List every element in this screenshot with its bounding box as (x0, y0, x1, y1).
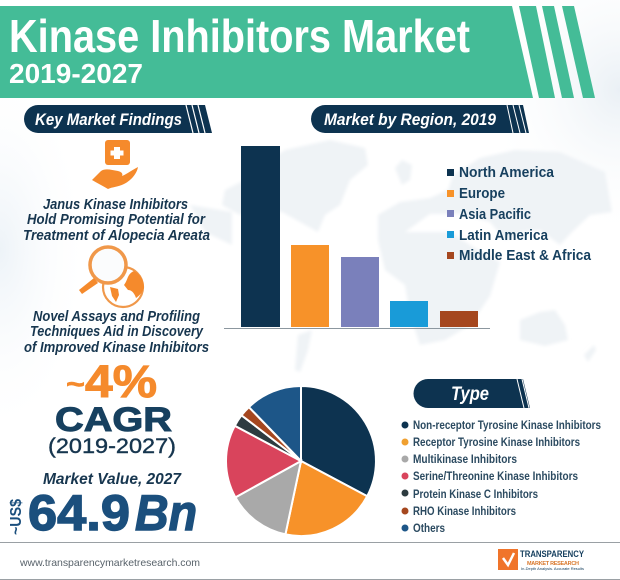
subtitle years: 2019-2027 (9, 58, 143, 89)
legend: types (402, 420, 601, 535)
legend: regions: Asia Pacific (459, 207, 531, 223)
text: janus kinase finding: Hold Promising Potential for (27, 212, 206, 228)
currency label: ~US$ (8, 499, 25, 535)
bar chart: market by region (224, 146, 490, 328)
text: novel assays finding: of Improved Kinase Inhibitors (24, 340, 209, 356)
heading: type (414, 379, 530, 408)
logo: transparency market research: MARKET RESEARCH (527, 561, 579, 567)
market value figure (28, 485, 197, 541)
text: novel assays finding: Novel Assays and Profiling (33, 309, 200, 325)
market value figure: 64.9 (28, 485, 130, 541)
logo: transparency market research: In-Depth Analysis. Accurate Results (521, 567, 584, 571)
pie chart: type (226, 386, 376, 536)
cagr value: ~ (66, 368, 85, 401)
cagr period: (2019-2027) (48, 435, 176, 458)
cagr value: 4% (85, 356, 157, 407)
market value label: Market Value, 2027 (43, 471, 182, 488)
legend: types: Multikinase Inhibitors (413, 454, 517, 466)
text: janus kinase finding (23, 197, 210, 244)
text: janus kinase finding: Janus Kinase Inhibitors (43, 197, 188, 213)
logo: transparency market research: TRANSPARENCY (520, 549, 584, 559)
legend: types: Serine/Threonine Kinase Inhibitors (413, 471, 578, 483)
icon: hand holding medical cross (92, 140, 138, 189)
legend: regions: North America (459, 165, 555, 181)
market value figure: Bn (135, 485, 197, 541)
legend: regions: Latin America (459, 228, 549, 244)
heading: market by region (311, 105, 529, 133)
legend: types: RHO Kinase Inhibitors (413, 506, 516, 518)
legend: regions: Europe (459, 186, 505, 202)
header banner (0, 6, 595, 98)
title: Kinase Inhibitors Market (9, 10, 470, 62)
heading: market by region: Market by Region, 2019 (324, 111, 497, 129)
text: janus kinase finding: Treatment of Alopecia Areata (23, 228, 210, 244)
website url: www.transparencymarketresearch.com (19, 557, 200, 569)
text: novel assays finding (24, 309, 209, 356)
heading: key market findings (24, 105, 212, 133)
heading: key market findings: Key Market Findings (35, 111, 182, 129)
legend: regions: Middle East & Africa (459, 248, 592, 264)
legend: types: Others (413, 523, 445, 535)
footer (0, 542, 620, 580)
logo: transparency market research (498, 549, 584, 571)
legend: types: Receptor Tyrosine Kinase Inhibitors (413, 437, 580, 449)
cagr label: CAGR (55, 401, 172, 439)
icon: magnifier and globe (79, 247, 144, 307)
world map background (190, 140, 612, 372)
legend: regions (447, 165, 592, 264)
legend: types: Protein Kinase C Inhibitors (413, 489, 538, 501)
text: novel assays finding: Techniques Aid in Discovery (30, 324, 204, 340)
heading: type: Type (451, 384, 489, 405)
